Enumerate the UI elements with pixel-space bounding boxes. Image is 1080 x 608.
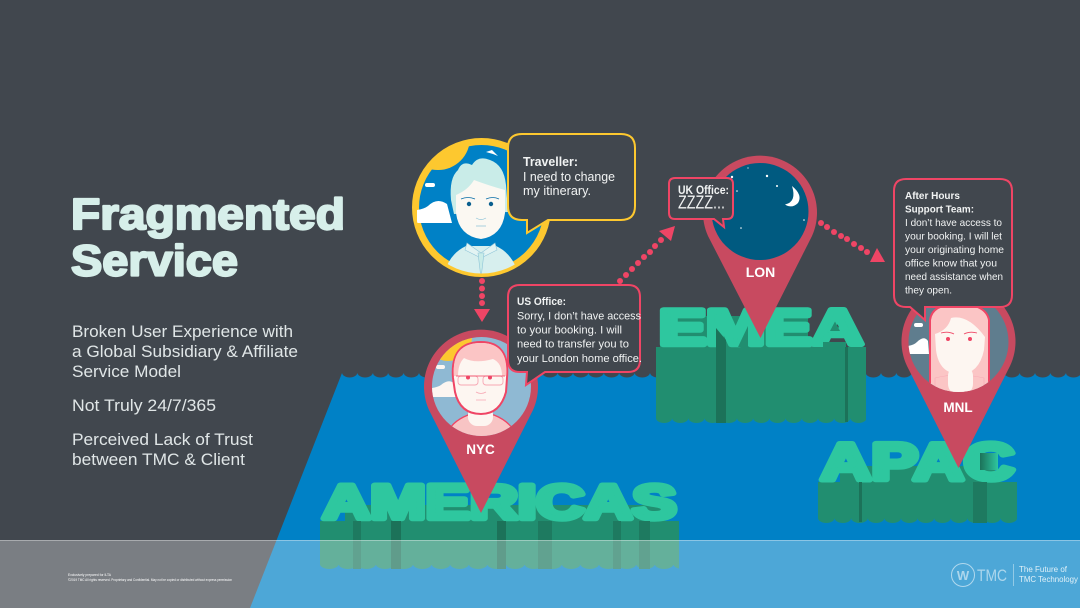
arrow: traveller to NYC [474, 278, 490, 322]
region: AMERICAS [320, 476, 679, 570]
footer logo: TMC [977, 566, 1007, 585]
callout: traveller: Traveller: [523, 154, 578, 169]
title [71, 190, 345, 286]
text block: key points: a Global Subsidiary & Affiliate [72, 342, 298, 361]
callout: after hours support team [894, 179, 1012, 320]
pin: MNL: MNL [943, 400, 973, 415]
arrow: NYC to LON [617, 226, 675, 284]
callout: after hours support team: office know that you [905, 258, 997, 270]
callout: after hours support team: need assistance when [905, 271, 1003, 283]
title: Service [71, 236, 238, 286]
callout: after hours support team: After Hours [905, 190, 960, 202]
text block: key points: between TMC & Client [72, 450, 245, 469]
region: EMEA [656, 300, 866, 424]
callout: UK office: UK Office: [678, 183, 729, 197]
callout: traveller [508, 134, 635, 233]
callout: after hours support team: Support Team: [905, 204, 974, 216]
icon: moon and stars [731, 167, 805, 229]
footer logo: The Future of [1019, 564, 1068, 574]
footer logo: W [957, 568, 970, 583]
region: AMERICAS: AMERICAS [322, 476, 676, 530]
footer band [0, 540, 1080, 608]
callout: after hours support team: your originating home [905, 244, 1004, 256]
footer legal text: Exclusively prepared for ILTA [68, 573, 112, 577]
footer logo [952, 564, 1079, 586]
pin: LON: LON [746, 264, 775, 280]
callout: after hours support team: I don’t have access to [905, 217, 1002, 229]
callout: after hours support team: your booking. I will let [905, 230, 1002, 242]
callout: US office: US Office: [517, 296, 566, 308]
callout: after hours support team: they open. [905, 284, 952, 296]
pin: NYC: NYC [466, 442, 495, 457]
callout: US office: to your booking. I will [517, 324, 622, 336]
title: Fragmented [71, 190, 345, 239]
callout: traveller: I need to change [523, 169, 615, 184]
region: APAC: APAC [820, 434, 1014, 492]
pin: NYC [424, 313, 538, 513]
callout: traveller: my itinerary. [523, 183, 591, 198]
callout: UK office [669, 178, 733, 227]
footer legal text: ©2019 TMC All rights reserved. Proprietary and Confidential. May not be copied or distributed without express permission [68, 578, 232, 582]
callout: US office: Sorry, I don’t have access [517, 310, 641, 322]
footer legal text [68, 573, 232, 582]
pin: MNL [902, 308, 1016, 468]
text block: key points: Not Truly 24/7/365 [72, 396, 216, 415]
water [250, 372, 1080, 608]
arrow: LON to MNL [818, 220, 885, 262]
text block: key points: Service Model [72, 362, 181, 381]
text block: key points: Broken User Experience with [72, 322, 293, 341]
callout: US office [508, 285, 642, 385]
callout: US office: need to transfer you to [517, 338, 629, 350]
text block: key points [72, 322, 298, 469]
region: EMEA: EMEA [659, 300, 863, 356]
text block: key points: Perceived Lack of Trust [72, 430, 253, 449]
region: APAC [818, 434, 1017, 524]
pin: LON [703, 156, 817, 338]
callout: UK office: ZZZZ... [678, 192, 725, 212]
callout: US office: your London home office. [517, 353, 642, 365]
traveller avatar [412, 138, 550, 277]
